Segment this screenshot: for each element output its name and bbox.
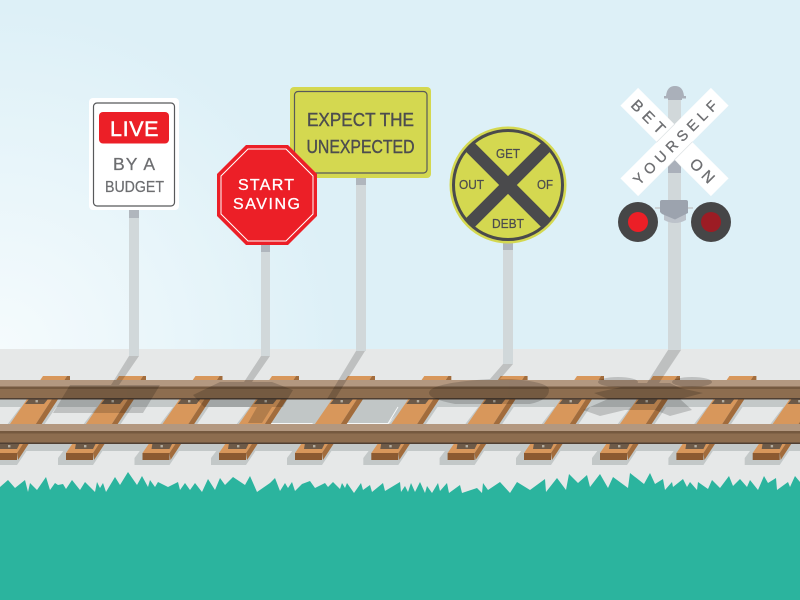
text: by a: BY A bbox=[113, 154, 155, 174]
signal arm bbox=[655, 207, 693, 209]
text: debt: DEBT bbox=[492, 217, 524, 231]
text: start: START bbox=[238, 177, 294, 194]
upper rail bbox=[0, 380, 800, 400]
crossbuck descending bar bbox=[620, 88, 729, 196]
shadow: crossbuck signal bbox=[583, 350, 712, 416]
sign: get out of debt bbox=[450, 126, 566, 364]
cast shadows of signs bbox=[53, 350, 712, 423]
text: yourself: YOURSELF bbox=[631, 98, 721, 189]
sign: start saving bbox=[217, 145, 317, 356]
post chevron bbox=[668, 160, 681, 173]
railroad track bbox=[0, 376, 800, 465]
post bbox=[356, 177, 366, 351]
post cap bbox=[664, 86, 686, 100]
shadow: yellow rectangle sign post bbox=[327, 351, 365, 399]
post bbox=[668, 98, 681, 350]
sign: expect the unexpected bbox=[290, 87, 431, 351]
rail and sleeper ground shadows bbox=[0, 388, 800, 465]
post bbox=[129, 210, 139, 356]
sign: bet on yourself crossing signal bbox=[618, 86, 731, 350]
text: get: GET bbox=[496, 147, 520, 161]
octagon bbox=[217, 145, 317, 245]
x bars bbox=[469, 146, 547, 224]
text: on: ON bbox=[686, 155, 718, 187]
round board bbox=[450, 126, 566, 244]
sign: live by a budget bbox=[89, 98, 179, 356]
signal hood bbox=[660, 200, 688, 223]
sky background bbox=[0, 0, 800, 350]
shadow: budget sign bbox=[53, 356, 160, 413]
wooden sleepers bbox=[0, 376, 800, 460]
shadow: stop sign bbox=[193, 356, 293, 423]
crossbuck rising bar bbox=[620, 88, 729, 196]
lower rail bbox=[0, 424, 800, 444]
sign board bbox=[290, 87, 431, 178]
post bbox=[261, 245, 270, 356]
grass bbox=[0, 472, 800, 600]
text: budget: BUDGET bbox=[105, 179, 164, 196]
right light bbox=[691, 202, 731, 242]
ground bbox=[0, 349, 800, 509]
shadow: round crossing sign bbox=[429, 364, 549, 404]
text: live: LIVE bbox=[110, 117, 158, 141]
text: expect the: EXPECT THE bbox=[307, 110, 414, 130]
text: bet: BET bbox=[627, 97, 669, 138]
red label bbox=[99, 112, 169, 144]
text: out: OUT bbox=[459, 178, 484, 192]
ground shadow: yellow rectangle sign bbox=[262, 399, 412, 424]
left light bbox=[618, 202, 658, 242]
sign board bbox=[89, 98, 179, 210]
post bbox=[503, 243, 513, 364]
text: saving: SAVING bbox=[233, 196, 300, 213]
text: unexpected: UNEXPECTED bbox=[306, 137, 414, 157]
text: of: OF bbox=[537, 178, 553, 192]
